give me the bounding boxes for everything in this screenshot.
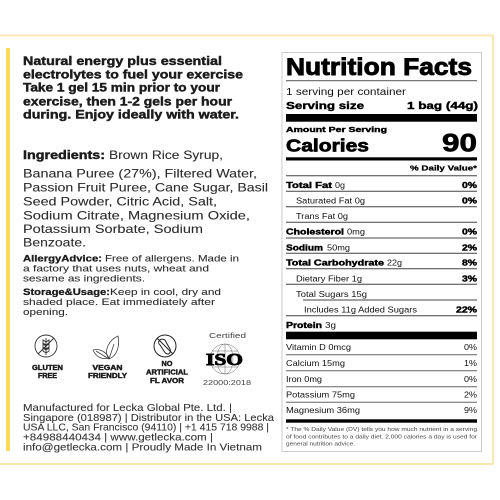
text block: ingredients: Passion Fruit Puree, Cane Sugar, Basil	[23, 181, 268, 195]
nutrient table: 3%	[462, 275, 477, 284]
nutrient table: Saturated Fat 0g	[296, 197, 365, 206]
text block: allergy advice: sesame as ingredients.	[23, 274, 145, 285]
text block: ingredients: Ingredients:	[23, 148, 105, 162]
badge: no artificial flavor: NO	[162, 359, 173, 368]
badge: ISO certification: 22000:2018	[203, 380, 251, 387]
nutrient table: Includes 11g Added Sugars	[304, 306, 417, 315]
text block: ingredients: Benzoate.	[23, 236, 86, 250]
badge: gluten free: GLUTEN	[32, 365, 63, 372]
text block: storage and usage: Storage&Usage:	[23, 287, 110, 298]
vitamins and minerals table: Calcium 15mg	[286, 358, 345, 368]
calories: % Daily Value*	[410, 166, 477, 173]
calories	[286, 125, 477, 173]
vitamins and minerals table: 9%	[464, 405, 477, 415]
icon: globe	[210, 344, 240, 374]
text block: product description: during. Enjoy ideally with water.	[23, 108, 239, 122]
vitamins and minerals table: Potassium 75mg	[286, 390, 355, 400]
text block: product description: Natural energy plus essential	[23, 54, 222, 68]
nutrient table: Protein	[286, 321, 322, 330]
text block: manufacturer details: info@getlecka.com | Proudly Made In Vietnam	[23, 442, 262, 454]
text block: manufacturer details: +84988440434 | www.getlecka.com |	[23, 432, 213, 444]
nutrient table: 0g	[335, 181, 345, 190]
text block: manufacturer details: USA LLC, San Francisco (94110) | +1 415 718 9988 |	[23, 422, 269, 434]
text block: ingredients: Seed Powder, Citric Acid, Salt,	[23, 195, 217, 209]
badge: no artificial flavor	[146, 335, 189, 385]
vitamins and minerals table: 1%	[464, 358, 477, 368]
text block: allergy advice: Free of allergens. Made in	[105, 254, 239, 265]
text block: storage and usage: opening.	[23, 307, 68, 318]
serving information: Serving size	[286, 101, 365, 112]
vitamins and minerals table: Magnesium 36mg	[286, 405, 360, 415]
nutrient table	[286, 181, 477, 330]
badge: gluten free: FREE	[38, 373, 57, 380]
icon: crossed dropper	[154, 335, 176, 357]
vitamins and minerals table	[286, 342, 477, 415]
footnote	[286, 427, 477, 448]
nutrient table: 50mg	[327, 243, 350, 252]
text block: allergy advice: a factory that uses nuts, wheat and	[23, 264, 209, 275]
vitamins and minerals table: Vitamin D 0mcg	[286, 342, 351, 352]
text block: storage and usage: Keep in cool, dry and	[110, 287, 221, 298]
calories: Calories	[286, 136, 369, 156]
nutrient table: 3g	[325, 321, 336, 330]
nutrient table: 2%	[462, 243, 477, 252]
footnote: of food contributes to a daily diet. 2,000 calories a day is used for	[286, 434, 477, 440]
badge: ISO certification	[203, 333, 251, 387]
text block: manufacturer details: Manufactured for Lecka Global Pte. Ltd. |	[23, 402, 232, 414]
text block: allergy advice	[23, 254, 239, 285]
badge: no artificial flavor: ARTIFICIAL	[146, 368, 189, 377]
text block: manufacturer details: Singapore (018987) | Distributor in the USA: Lecka	[23, 412, 274, 424]
text block: product description	[23, 54, 243, 122]
vitamins and minerals table: 0%	[464, 342, 477, 352]
text block: ingredients: Brown Rice Syrup,	[109, 148, 223, 162]
text block: storage and usage	[23, 287, 221, 318]
nutrient table: 0mg	[347, 228, 365, 237]
heading: nutrition facts: Nutrition Facts	[286, 54, 472, 81]
vitamins and minerals table: Iron 0mg	[286, 374, 322, 384]
footnote: general nutrition advice.	[286, 442, 355, 448]
nutrient table: Total Carbohydrate	[286, 259, 385, 268]
serving information: 1 serving per container	[286, 87, 407, 98]
panel: nutrition facts	[282, 52, 482, 452]
nutrient table: 0%	[462, 228, 477, 237]
nutrient table: 22g	[387, 259, 402, 268]
nutrient table: Dietary Fiber 1g	[296, 275, 362, 284]
calories: 90	[442, 130, 477, 158]
nutrient table: Total Fat	[286, 181, 332, 190]
text block: storage and usage: shaded place. Eat immediately after	[23, 297, 215, 308]
text block: product description: Take 1 gel 15 min prior to your	[23, 81, 220, 95]
serving information: 1 bag (44g)	[407, 101, 478, 112]
footnote: * The % Daily Value (DV) tells you how much nutrient in a serving	[286, 427, 477, 433]
text block: manufacturer details	[23, 402, 274, 454]
rule lines and bars	[286, 80, 477, 423]
text block: ingredients: Sodium Citrate, Magnesium Oxide,	[23, 208, 250, 222]
nutrient table: 0%	[462, 181, 477, 190]
badge: vegan friendly: VEGAN	[92, 365, 122, 372]
badge: vegan friendly	[88, 336, 127, 380]
text block: ingredients: Potassium Sorbate, Sodium	[23, 222, 203, 236]
text block: ingredients	[23, 148, 268, 250]
nutrient table: 0%	[462, 197, 477, 206]
badge: ISO certification: Certified	[209, 333, 246, 340]
text block: ingredients: Banana Puree (27%), Filtered Water,	[23, 167, 257, 181]
calories: Amount Per Serving	[286, 125, 387, 134]
text block: allergy advice: AllergyAdvice:	[23, 254, 102, 265]
nutrient table: 22%	[456, 306, 477, 315]
nutrient table: Total Sugars 15g	[296, 290, 367, 299]
nutrient table: Cholesterol	[286, 228, 344, 237]
icon: leaves	[93, 336, 119, 359]
badge: no artificial flavor: FL AVOR	[150, 376, 185, 385]
vitamins and minerals table: 0%	[464, 374, 477, 384]
badge: ISO certification: ISO	[206, 350, 243, 369]
nutrient table: Trans Fat 0g	[296, 212, 348, 221]
serving information	[286, 87, 478, 112]
nutrient table: 8%	[462, 259, 477, 268]
text block: product description: exercise, then 1-2 gels per hour	[23, 94, 232, 108]
text block: product description: electrolytes to fuel your exercise	[23, 67, 243, 81]
badge: gluten free	[32, 335, 63, 380]
icon: crossed wheat	[35, 335, 57, 357]
left accent bar	[6, 48, 10, 451]
vitamins and minerals table: 2%	[464, 390, 477, 400]
nutrient table: Sodium	[286, 243, 323, 252]
badge: vegan friendly: FRIENDLY	[88, 373, 127, 380]
